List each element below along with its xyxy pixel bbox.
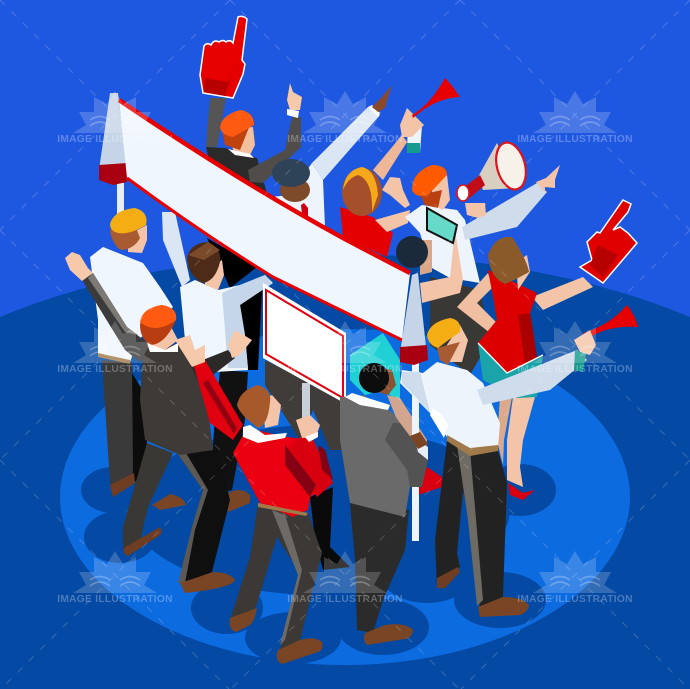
watermark logos and captions: IMAGE ILLUSTRATION [57,364,173,375]
watermark logos and captions: IMAGE ILLUSTRATION [287,134,403,145]
person: man in red sweater [175,335,333,664]
watermark logos and captions [57,91,633,605]
floor: dark disc [0,254,690,689]
icon: megaphone [457,139,531,201]
person: man in white with horn, front right [400,318,596,617]
person: black suit figure behind banner [207,238,262,370]
watermark logos and captions: IMAGE ILLUSTRATION [517,594,633,605]
person: man with megaphone [405,165,560,375]
watermark logos and captions: IMAGE ILLUSTRATION [287,364,403,375]
person: left man in white shirt [90,208,173,497]
icon: red foam hand, top [200,16,247,98]
floor: light inner disc [60,329,630,665]
person: back of dark-haired person with tablet [396,230,463,303]
person: man in dark suit with raised arms [65,252,252,593]
person: man with foam finger (back left) [206,83,302,197]
person: man in grey suit [340,363,428,645]
icon: tablet [427,208,457,243]
icon: red vuvuzela horn, right [583,305,638,337]
banner: white cloth with red edges [119,100,410,340]
watermark logos and captions: IMAGE ILLUSTRATION [57,134,173,145]
icon: red foam hand, right [580,200,637,283]
banner: right pole [400,273,428,541]
person: man in white, centre left [162,212,273,512]
person: man in white with raised arm [271,85,392,227]
banner: left pole [99,93,127,215]
floor: crowd shadows [81,425,556,664]
person: black legs behind red sweater [310,487,350,570]
person: man sign holder trousers [265,360,345,450]
icon: red vuvuzela horn, top [412,78,460,118]
person: woman with blonde hair and horn [340,108,424,257]
watermark logos and captions: IMAGE ILLUSTRATION [287,594,403,605]
watermark logos and captions: IMAGE ILLUSTRATION [517,364,633,375]
person: woman in red dress [457,237,593,500]
sign board [263,283,346,453]
person: teal skirt figure [350,333,442,495]
watermark logos and captions: IMAGE ILLUSTRATION [57,594,173,605]
watermark logos and captions: IMAGE ILLUSTRATION [517,134,633,145]
